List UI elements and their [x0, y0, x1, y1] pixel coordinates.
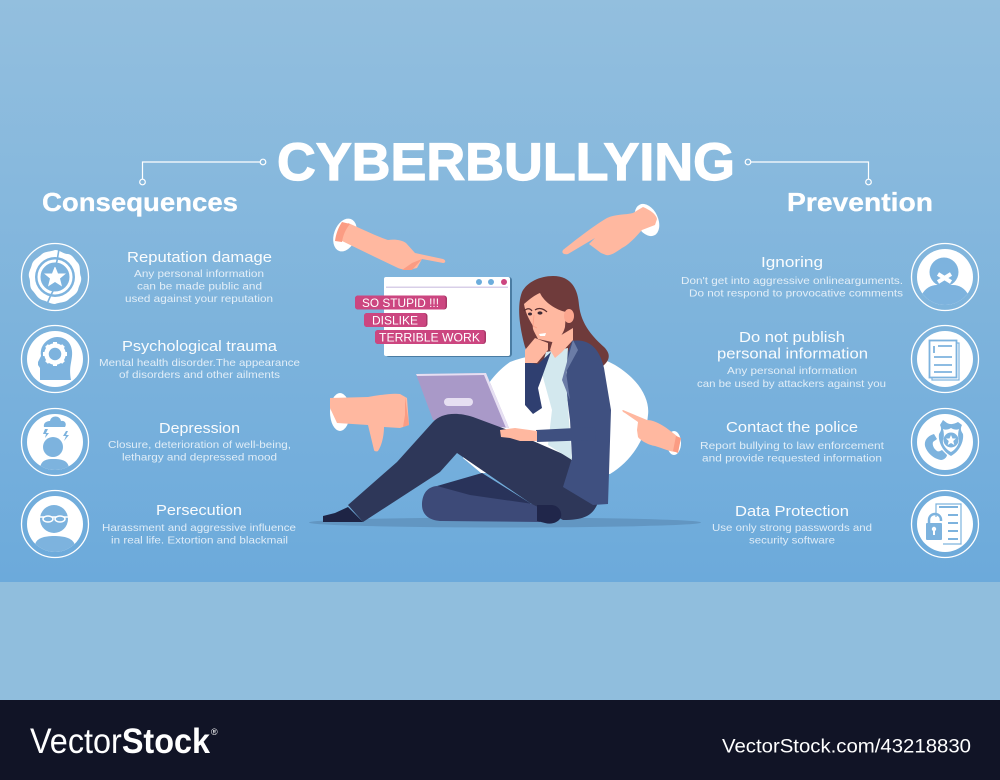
description: security software	[749, 534, 835, 546]
footer image id: VectorStock.com/43218830	[722, 736, 971, 758]
forearm	[536, 427, 596, 442]
label: Depression	[159, 421, 240, 437]
footer logo: VectorStock	[30, 722, 210, 761]
label: Persecution	[156, 503, 242, 519]
raised arm sleeve	[525, 352, 551, 414]
description	[681, 275, 903, 300]
item: do not publish	[697, 326, 978, 392]
icon: cracked badge	[22, 244, 88, 310]
hand: thumbs down	[330, 393, 409, 451]
shirt	[541, 348, 572, 460]
tag: dislike	[364, 313, 428, 328]
lapel	[562, 340, 578, 400]
hand: pointing right side	[622, 410, 681, 455]
front leg	[348, 414, 597, 522]
tag: so stupid: SO STUPID !!!	[362, 296, 439, 310]
icon: document	[912, 326, 978, 392]
illustration: woman with laptop	[309, 276, 701, 528]
title: CYBERBULLYING	[277, 133, 735, 192]
item: psychological trauma	[22, 326, 300, 392]
connector left	[140, 159, 266, 185]
description: lethargy and depressed mood	[122, 452, 277, 464]
panel: consequences list	[22, 244, 300, 558]
description	[697, 365, 886, 390]
description	[125, 268, 273, 305]
registered mark: ®	[211, 727, 218, 737]
label: Psychological trauma	[122, 339, 278, 355]
lower band	[0, 582, 1000, 700]
white blob	[463, 353, 648, 474]
folded leg	[422, 473, 540, 522]
background panel	[0, 0, 1000, 582]
footer bar	[0, 700, 1000, 780]
tag: terrible work: TERRIBLE WORK	[379, 330, 480, 344]
face	[524, 293, 566, 342]
label: Data Protection	[735, 504, 849, 520]
description	[712, 522, 872, 546]
description: Any personal information	[134, 268, 264, 280]
description: Mental health disorder.The appearance	[99, 357, 300, 369]
hair back	[519, 276, 609, 366]
item: persecution	[22, 490, 296, 558]
icon: phone and badge	[912, 408, 978, 476]
description: Closure, deterioration of well-being,	[108, 439, 291, 451]
label: Do not publish	[739, 330, 845, 346]
item: depression	[22, 408, 291, 476]
right shoe	[537, 505, 561, 524]
description: Do not respond to provocative comments	[689, 288, 903, 300]
neck	[550, 328, 573, 358]
description: Any personal information	[727, 365, 857, 377]
hand: pointing top right	[562, 200, 664, 255]
ground shadow	[309, 518, 701, 528]
hand: pointing top left	[329, 215, 445, 270]
left shoe	[323, 507, 363, 522]
label: personal information	[717, 346, 868, 362]
description	[108, 439, 291, 464]
label: Reputation damage	[127, 250, 272, 266]
description: Use only strong passwords and	[712, 522, 872, 534]
description	[102, 522, 296, 546]
icon: person with mask	[22, 490, 88, 558]
connector right	[745, 159, 871, 185]
lap hand	[500, 428, 537, 441]
icon: padlock and document	[912, 490, 978, 558]
label	[717, 330, 868, 362]
description: of disorders and other ailments	[119, 369, 280, 381]
eyes and mouth	[524, 309, 547, 336]
heading: consequences: Consequences	[42, 187, 238, 217]
window dots	[476, 279, 507, 285]
blazer	[563, 341, 611, 505]
heading: prevention: Prevention	[787, 187, 933, 217]
item: ignoring	[681, 244, 978, 310]
description: used against your reputation	[125, 293, 273, 305]
description: and provide requested information	[702, 452, 882, 464]
icon: gagged person	[912, 244, 978, 310]
description	[99, 357, 300, 381]
icon: head with gears	[22, 326, 88, 392]
description: Report bullying to law enforcement	[700, 440, 884, 452]
icon: person under cloud	[22, 408, 88, 476]
description: Harassment and aggressive influence	[102, 522, 296, 534]
item: contact the police	[700, 408, 978, 476]
item: reputation damage	[22, 244, 273, 310]
laptop	[416, 373, 509, 428]
description: Don't get into aggressive onlinearguments.	[681, 275, 903, 287]
description	[700, 440, 884, 464]
description: in real life. Extortion and blackmail	[111, 534, 288, 546]
description: can be made public and	[137, 280, 262, 292]
panel: prevention list	[681, 244, 978, 558]
tag: dislike: DISLIKE	[372, 314, 418, 328]
ear	[564, 309, 574, 323]
description: can be used by attackers against you	[697, 378, 886, 390]
chin hand	[525, 338, 548, 363]
label: Ignoring	[761, 255, 823, 271]
browser window	[384, 277, 512, 357]
label: Contact the police	[726, 420, 858, 436]
item: data protection	[712, 490, 978, 558]
